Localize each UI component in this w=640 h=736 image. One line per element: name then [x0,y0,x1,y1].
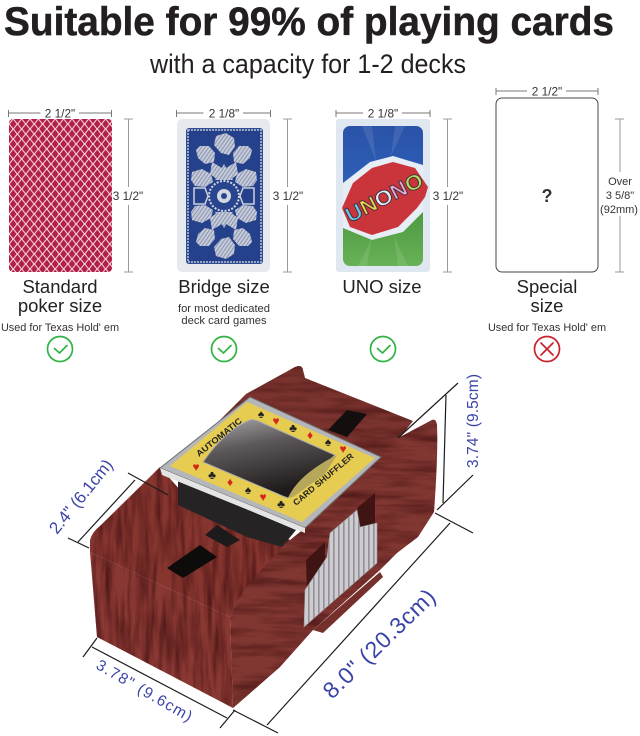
product: card shuffler [90,366,437,708]
label: size [531,295,563,316]
side slots [306,493,375,590]
depth 2.4 lines [68,473,168,548]
lid suits: ♥ [259,490,267,504]
title: Suitable for 99% of playing cards [4,0,614,44]
lid suits: ♥ [339,442,347,456]
slot: rear [328,410,367,437]
body: rear top [200,366,413,500]
lid suits [192,407,347,511]
lid suits: ♦ [227,475,233,489]
clear card tray [304,510,377,627]
card: UNO back [336,119,430,272]
lid suits: ♣ [277,497,285,511]
width dimension [8,106,112,120]
width dimension [496,84,598,98]
lid suits: ♠ [325,435,332,449]
icon: check [48,336,72,362]
height dimension [433,119,463,272]
width dimension: 2 1/8" [209,106,239,120]
label: 2.4 in: 2.4" (6.1cm) [45,456,117,538]
note: deck card games [181,315,267,327]
lid suits: ♦ [307,428,313,442]
lid: clear frame [160,397,381,528]
height dimension: 3 1/2" [433,189,463,203]
note: Used for Texas Hold' em [1,322,119,334]
label: Special [517,276,577,297]
height 3.74 lines [398,383,473,533]
lid text: AUTOMATIC [194,416,244,459]
label: 3.78 in: 3.78" (9.6cm) [93,657,195,725]
body: front face [90,552,233,708]
panel: special size [488,84,638,362]
width 3.78 lines [83,638,278,733]
height dimension [600,119,638,272]
logo text: UNONO [342,169,427,227]
card: blue floral back [177,119,270,272]
label: Standard [22,276,98,297]
icon: cross [534,336,560,362]
black housing under lid [178,480,296,547]
lid suits: ♥ [272,414,280,428]
height dimension: 3 1/2" [273,189,303,203]
width dimension [336,106,430,120]
height dimension: 3 1/2" [113,189,143,203]
width dimension: 2 1/2" [532,84,562,98]
lid suits: ♠ [258,407,265,421]
panel: standard poker size [1,106,143,362]
roller [205,525,240,547]
length 8.0 lines [267,523,450,725]
body: right side [230,420,437,708]
label: 8.0 in: 8.0" (20.3cm) [317,583,440,704]
width dimension [176,106,270,120]
height dimension [273,119,303,272]
icon: check [370,336,396,362]
base tab [313,572,383,633]
note: for most dedicated [178,303,270,315]
card: red back [9,119,112,272]
question mark: ? [542,186,552,206]
label: poker size [18,295,102,316]
product: card shuffler: CARD SHUFFLER [291,451,356,508]
lid: yellow face [170,402,375,522]
label: 3.74 in: 3.74" (9.5cm) [465,374,482,468]
height dimension: (92mm) [600,204,638,216]
lid suits: ♠ [245,483,252,497]
label: UNO size [342,276,422,297]
lid suits: ♣ [208,468,216,482]
panel: UNO size [336,106,463,362]
body: top left tray [90,467,290,617]
height dimension: Over [608,176,632,188]
width dimension: 2 1/8" [368,106,398,120]
slot: front tray [167,545,217,578]
height dimension [113,119,143,272]
width dimension: 2 1/2" [45,106,75,120]
lid: window [203,420,335,498]
label: Bridge size [178,276,270,297]
icon: check [212,336,236,362]
lid suits: ♣ [289,421,297,435]
dimension labels [45,374,482,725]
height dimension: 3 5/8" [606,190,634,202]
dimension lines [68,383,473,733]
panel: bridge size [176,106,303,362]
card: blank outline [496,98,598,272]
subtitle: with a capacity for 1-2 decks [149,49,466,79]
note: Used for Texas Hold' em [488,322,606,334]
lid suits: ♥ [192,460,200,474]
